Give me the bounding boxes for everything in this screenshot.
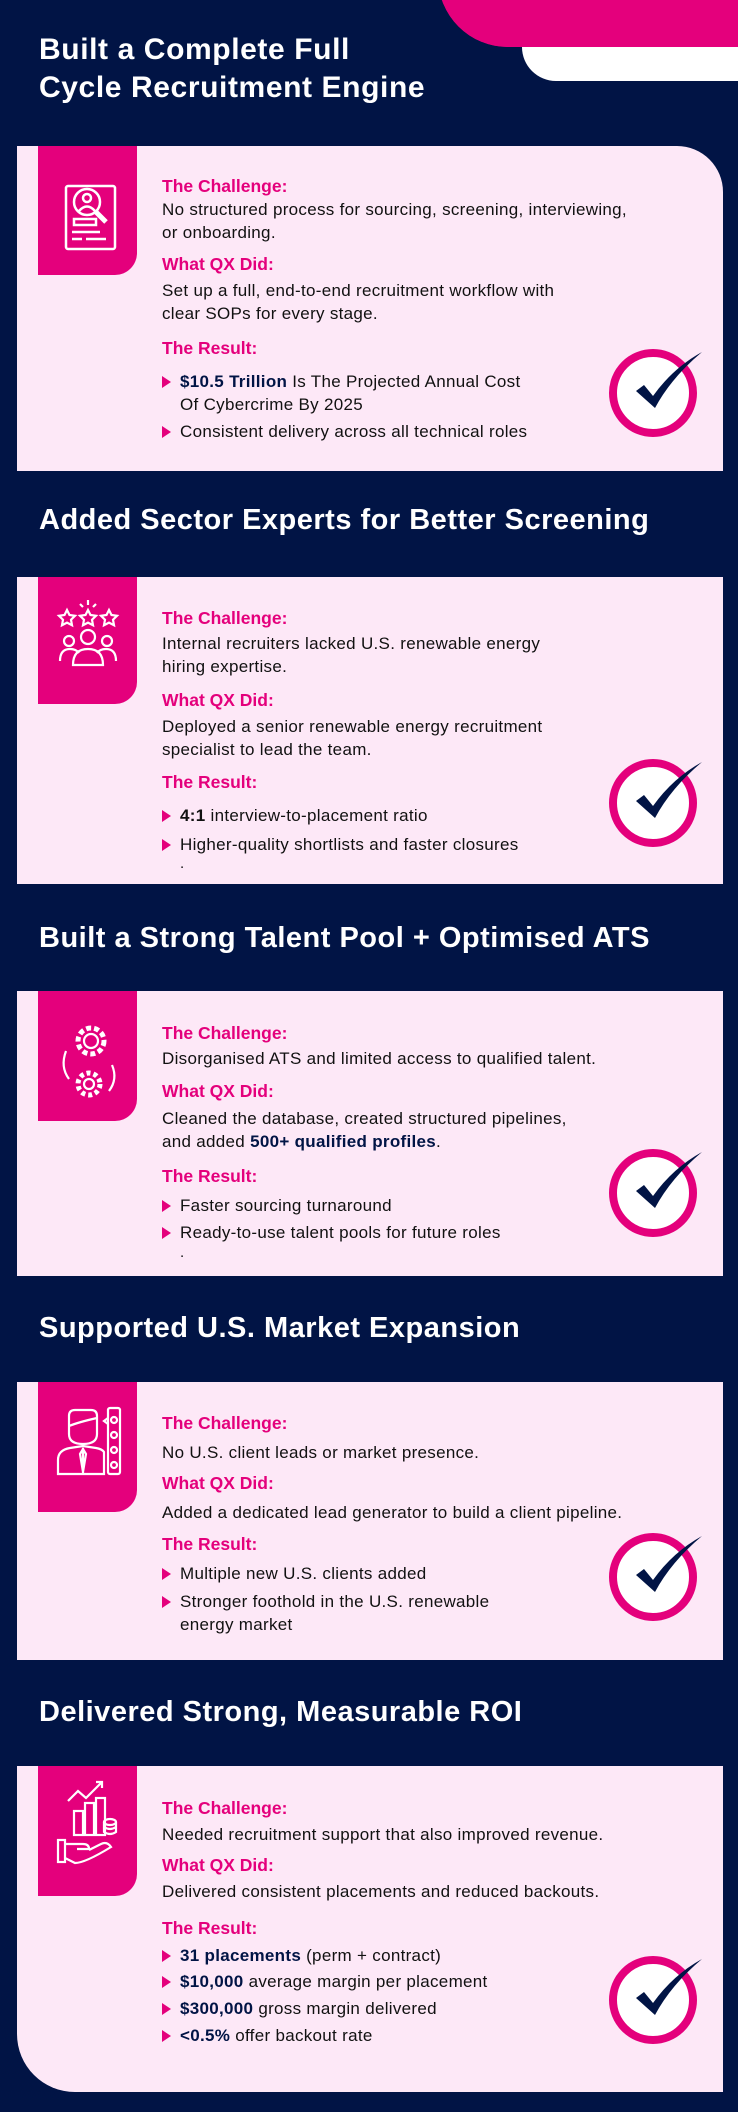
panel 5: $10,000 average margin per placement: [180, 1972, 488, 1991]
challenge: The Challenge:: [162, 176, 287, 196]
panel 4: Added a dedicated lead generator to build a client pipeline.: [162, 1503, 622, 1522]
check icon: [609, 349, 702, 437]
icon tab: growth chart in hand: [38, 1766, 137, 1896]
action text: clear SOPs for every stage.: [162, 304, 378, 322]
panel 3: .: [180, 1244, 184, 1261]
panel 4: [17, 1382, 723, 1660]
panel 5: $300,000 gross margin delivered: [180, 1999, 437, 2018]
panel 2: specialist to lead the team.: [162, 740, 372, 758]
panel 3: and added 500+ qualified profiles.: [162, 1132, 441, 1150]
panel 2: .: [180, 855, 184, 872]
challenge text: [162, 200, 627, 242]
icon tab: person with ratings: [38, 1382, 137, 1512]
what qx did: What QX Did:: [162, 254, 274, 274]
bullet 1: [162, 371, 520, 416]
title 2: Added Sector Experts for Better Screening: [39, 504, 649, 536]
panel 5: Delivered consistent placements and reduced backouts.: [162, 1882, 599, 1901]
panel 5: The Result:: [162, 1918, 257, 1938]
panel 3: The Result:: [162, 1166, 257, 1186]
panel 3: Faster sourcing turnaround: [180, 1196, 392, 1215]
panel 4: Stronger foothold in the U.S. renewable: [180, 1592, 489, 1611]
panel 4: No U.S. client leads or market presence.: [162, 1443, 479, 1462]
panel 5: Needed recruitment support that also improved revenue.: [162, 1825, 603, 1844]
panel 4: The Challenge:: [162, 1413, 287, 1433]
panel 3: What QX Did:: [162, 1081, 274, 1101]
title 1: Cycle Recruitment Engine: [39, 71, 425, 104]
panel 5: 31 placements (perm + contract): [180, 1946, 441, 1965]
panel 2: Deployed a senior renewable energy recruitment: [162, 717, 542, 736]
action text: [162, 281, 554, 322]
icon tab: team stars: [38, 577, 137, 704]
panel 5: <0.5% offer backout rate: [180, 2026, 373, 2045]
panel 2: The Result:: [162, 772, 257, 792]
title 1: Built a Complete Full: [39, 33, 350, 66]
panel 4: The Result:: [162, 1534, 257, 1554]
panel 2: [17, 577, 723, 884]
panel 3: Disorganised ATS and limited access to qualified talent.: [162, 1049, 596, 1068]
icon tab: search profile: [38, 146, 137, 275]
title 4: Supported U.S. Market Expansion: [39, 1312, 520, 1344]
panel 3: Cleaned the database, created structured pipelines,: [162, 1109, 567, 1128]
decorative: top-right pink shape: [438, 0, 738, 47]
decorative: top-right white shape: [522, 47, 738, 81]
panel 2: 4:1 interview-to-placement ratio: [180, 806, 428, 825]
panel 4: Multiple new U.S. clients added: [180, 1564, 426, 1583]
panel 3: The Challenge:: [162, 1023, 287, 1043]
title 3: Built a Strong Talent Pool + Optimised ATS: [39, 922, 650, 954]
bullet 1: $10.5 Trillion Is The Projected Annual Cost: [180, 372, 520, 391]
panel 2: The Challenge:: [162, 608, 287, 628]
panel 1: [17, 146, 723, 471]
title 1: [39, 33, 425, 104]
challenge text: or onboarding.: [162, 222, 276, 242]
icon tab: gears: [38, 991, 137, 1121]
panel 2: Internal recruiters lacked U.S. renewable energy: [162, 634, 540, 653]
panel 5: What QX Did:: [162, 1855, 274, 1875]
result: The Result:: [162, 338, 257, 358]
panel 3: [17, 991, 723, 1276]
panel 2: Higher-quality shortlists and faster closures: [180, 835, 519, 854]
panel 3: Ready-to-use talent pools for future roles: [180, 1223, 501, 1242]
panel 5: [17, 1766, 723, 2092]
panel 2: What QX Did:: [162, 690, 274, 710]
panel 2: hiring expertise.: [162, 656, 287, 676]
action text: Set up a full, end-to-end recruitment workflow with: [162, 281, 554, 300]
bullet 2: Consistent delivery across all technical roles: [180, 422, 527, 441]
panel 4: What QX Did:: [162, 1473, 274, 1493]
bullet 1: Of Cybercrime By 2025: [180, 394, 363, 414]
title 5: Delivered Strong, Measurable ROI: [39, 1696, 522, 1728]
panel 4: energy market: [180, 1614, 293, 1634]
panel 5: The Challenge:: [162, 1798, 287, 1818]
challenge text: No structured process for sourcing, screening, interviewing,: [162, 200, 627, 219]
